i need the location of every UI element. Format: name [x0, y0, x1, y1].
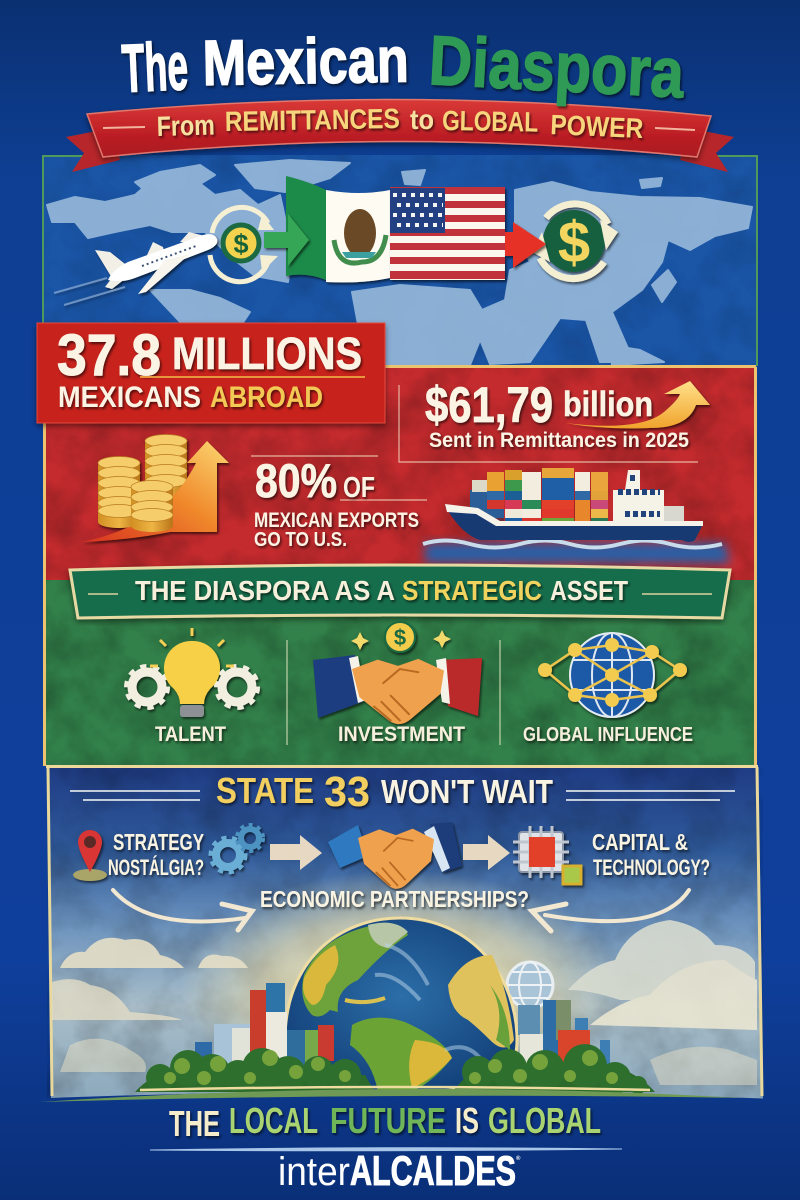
stat: exports: OF — [343, 472, 375, 504]
heading: state 33 — [70, 768, 735, 816]
logo: interALCALDES: ALCALDES — [350, 1147, 516, 1194]
arrow: red to dollar — [505, 222, 546, 268]
icon: Mexican flag — [286, 176, 390, 282]
footer tagline: IS — [455, 1100, 479, 1141]
clouds — [52, 920, 757, 1085]
icon: gold coin stacks and rising arrow — [82, 434, 229, 542]
icon: container ship — [445, 468, 703, 542]
icon: US flag — [390, 187, 505, 280]
stat: remittances: $61,79 — [425, 377, 553, 433]
arrow: to handshake — [270, 835, 322, 870]
title — [120, 21, 687, 112]
subtitle text: GLOBAL — [442, 105, 538, 138]
arrow: to chip — [463, 835, 510, 870]
sun glow — [180, 870, 620, 1100]
banner: strategic asset heading: STRATEGIC — [402, 575, 542, 606]
icon: right city buildings — [518, 1000, 610, 1074]
subtitle text — [156, 103, 644, 144]
stat: remittances — [425, 377, 689, 452]
title: Diaspora — [427, 21, 687, 112]
stat: exports: MEXICAN EXPORTS — [254, 509, 419, 532]
banner: strategic asset heading — [70, 565, 730, 618]
stat: exports: GO TO U.S. — [254, 529, 347, 551]
footer tagline — [169, 1100, 601, 1144]
panel: green strategic asset — [43, 565, 757, 766]
subtitle text: REMITTANCES — [225, 103, 400, 137]
icon: investment handshake: $ — [394, 625, 406, 650]
icon: airplane — [54, 232, 217, 305]
icon: growth arrow — [565, 381, 710, 428]
heading: state 33: 33 — [324, 768, 370, 816]
water — [423, 540, 730, 563]
footer background below arc — [0, 1092, 800, 1200]
panel: red remittances and exports — [43, 365, 757, 583]
green frame around map — [43, 156, 757, 366]
label: capital and technology — [592, 829, 710, 880]
subtitle text: POWER — [550, 109, 644, 144]
label: investment: INVESTMENT — [338, 723, 465, 746]
stat: exports — [254, 454, 419, 551]
footer line — [150, 1148, 622, 1151]
banner: strategic asset heading: THE DIASPORA AS A — [135, 575, 395, 606]
frame lines — [251, 385, 698, 500]
icon: map pin — [73, 830, 107, 881]
icon: big dollar coin: $ — [558, 210, 590, 275]
icon: microchips — [513, 826, 581, 884]
arrow: curved left — [113, 890, 252, 930]
title: The — [120, 28, 190, 107]
callout: 37.8 millions abroad: 37.8 — [57, 323, 161, 388]
icon: left city buildings — [195, 983, 334, 1077]
arrow: green to flags — [264, 214, 309, 266]
callout: 37.8 millions abroad: ABROAD — [210, 381, 323, 414]
subtitle text: to — [410, 104, 434, 135]
label: strategy nostalgia: NOSTÁLGIA? — [108, 855, 204, 880]
icon: blue gears — [211, 825, 263, 872]
gold ground line — [140, 1087, 650, 1090]
dividers — [287, 640, 500, 745]
panel: world map — [43, 155, 757, 367]
ribbon body — [87, 99, 711, 157]
label: strategy nostalgia: STRATEGY — [113, 829, 204, 855]
footer tagline: FUTURE — [330, 1100, 446, 1141]
callout: 37.8 millions abroad: MEXICANS — [58, 381, 201, 414]
label: global influence: GLOBAL INFLUENCE — [523, 724, 693, 746]
footer tagline: THE — [169, 1103, 220, 1144]
icon: earth globe — [285, 918, 517, 1092]
icon: small dollar coin with arrows — [210, 207, 278, 282]
callout: 37.8 millions abroad: MILLIONS — [172, 328, 362, 379]
banner: strategic asset heading: ASSET — [550, 575, 628, 606]
logo: interALCALDES — [278, 1147, 521, 1194]
title: Mexican — [202, 23, 409, 99]
label: capital and technology: CAPITAL & — [592, 829, 688, 855]
logo: interALCALDES: inter — [278, 1150, 350, 1194]
panel: state 33 — [46, 765, 763, 1100]
stat: remittances: billion — [563, 385, 653, 424]
subtitle text: From — [156, 109, 215, 142]
icon: talent lightbulb and gears — [127, 628, 257, 717]
ribbon: subtitle — [66, 99, 734, 172]
icon: trees — [135, 1044, 655, 1094]
logo: interALCALDES: ® — [516, 1155, 521, 1162]
icon: big dollar coin — [532, 204, 618, 279]
icon: global influence network — [538, 633, 687, 717]
icon: investment handshake — [313, 622, 482, 724]
callout: 37.8 millions abroad — [37, 323, 385, 423]
ribbon tails — [66, 128, 734, 172]
map landmasses — [47, 160, 752, 365]
arrow: rising — [82, 441, 229, 542]
heading: state 33: WON'T WAIT — [381, 773, 553, 810]
stat: exports: 80% — [255, 454, 337, 507]
stat: remittances: Sent in Remittances in 2025 — [429, 429, 689, 452]
icon: small globe tower — [507, 962, 553, 1040]
footer tagline: GLOBAL — [488, 1100, 601, 1141]
footer tagline: LOCAL — [229, 1100, 318, 1141]
label: economic partnerships: ECONOMIC PARTNERSHIPS? — [260, 886, 529, 912]
arrow: curved right — [532, 890, 689, 931]
ground arc — [40, 1089, 742, 1102]
label: strategy nostalgia — [108, 829, 204, 880]
label: talent: TALENT — [155, 723, 226, 746]
icon: handshake — [328, 822, 462, 889]
heading: state 33: STATE — [216, 770, 314, 811]
label: capital and technology: TECHNOLOGY? — [593, 855, 710, 880]
icon: small dollar coin with arrows: $ — [233, 229, 249, 259]
